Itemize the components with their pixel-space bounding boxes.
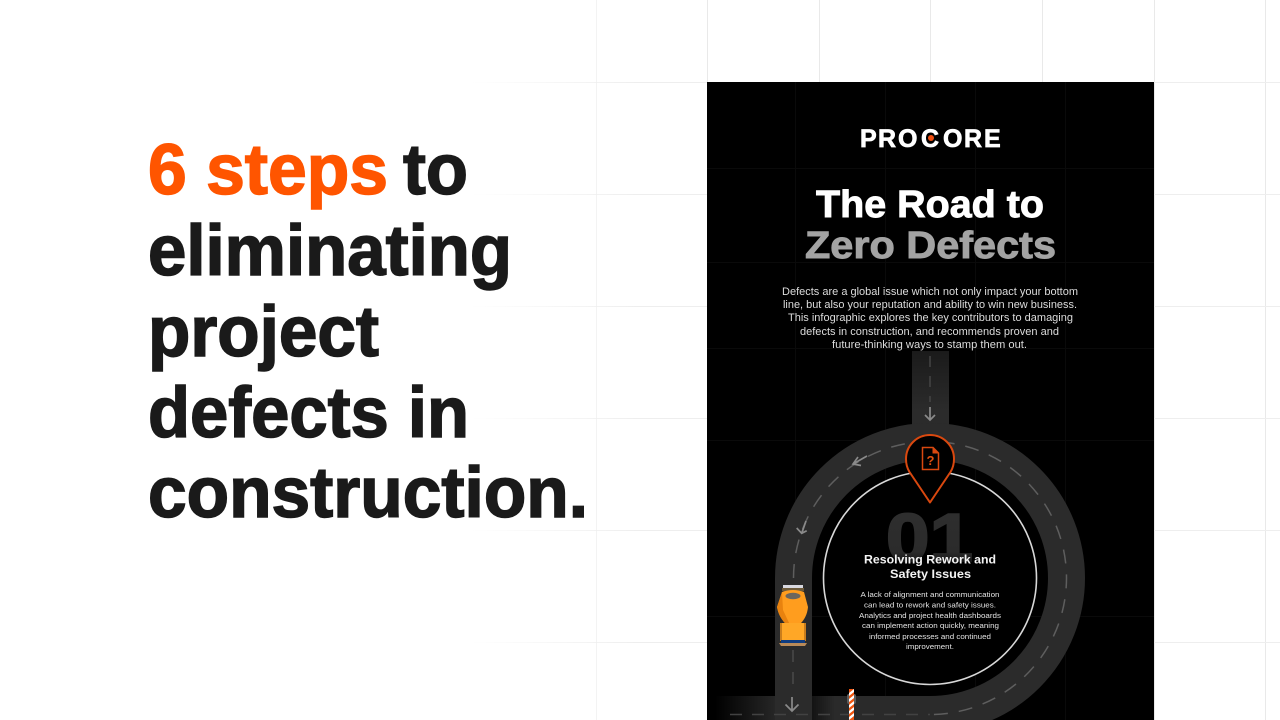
step body text: A lack of alignment and communication — [860, 590, 1000, 599]
step body text: improvement. — [906, 642, 954, 651]
headline: eliminating — [148, 212, 512, 291]
intro text: defects in construction, and recommends proven and — [800, 326, 1059, 338]
step body text: can lead to rework and safety issues. — [864, 600, 996, 610]
icon: concrete mixer truck — [777, 585, 808, 646]
headline — [148, 131, 588, 533]
road — [715, 351, 1066, 720]
step heading: Safety Issues — [890, 567, 971, 581]
intro text — [782, 286, 1078, 351]
headline: to — [403, 131, 468, 210]
step body text: informed processes and continued — [869, 632, 991, 641]
step body text — [859, 590, 1001, 651]
step number: 01 — [886, 500, 973, 576]
step circle — [824, 472, 1036, 684]
logo: Procore: PROCORE — [860, 125, 1001, 153]
icon: road barrier — [847, 689, 856, 720]
step body text: can implement action quickly, meaning — [862, 621, 999, 630]
headline: defects in — [148, 374, 469, 453]
headline: 6 steps — [148, 131, 388, 210]
arrows — [786, 407, 935, 711]
step heading: Resolving Rework and — [864, 552, 996, 566]
panel: infographic preview — [707, 82, 1154, 720]
headline: construction. — [148, 454, 588, 533]
icon: location pin: ? — [927, 453, 935, 468]
intro text: line, but also your reputation and ability to win new business. — [783, 299, 1077, 311]
step body text: Analytics and project health dashboards — [859, 611, 1001, 620]
step heading — [864, 552, 996, 581]
title: Zero Defects — [805, 225, 1056, 267]
headline: project — [148, 293, 379, 372]
intro text: future-thinking ways to stamp them out. — [832, 339, 1027, 351]
intro text: This infographic explores the key contributors to damaging — [788, 312, 1073, 324]
title: The Road to — [816, 184, 1044, 226]
logo: Procore — [861, 128, 1000, 148]
icon: location pin — [906, 435, 954, 502]
title — [806, 189, 1055, 259]
intro text: Defects are a global issue which not only impact your bottom — [782, 286, 1078, 298]
